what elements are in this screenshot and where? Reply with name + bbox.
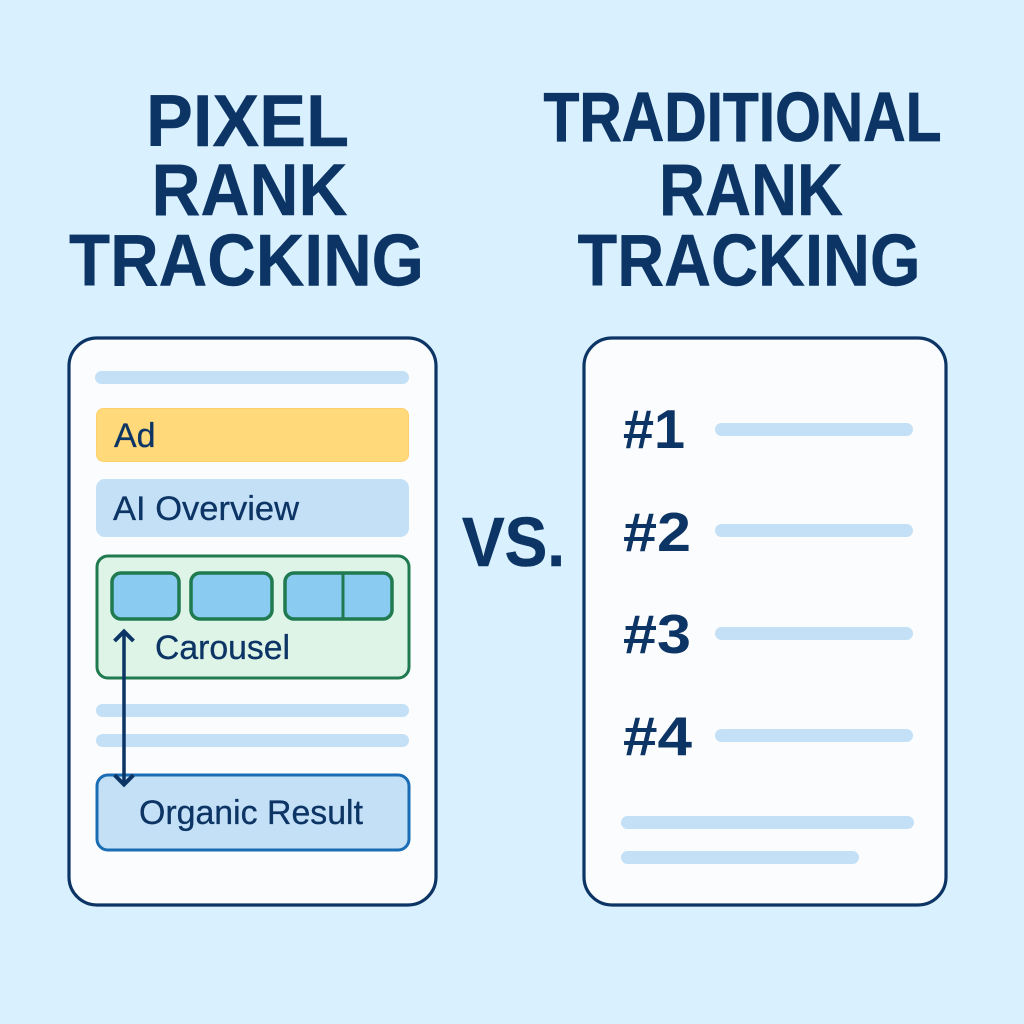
rank 2: #2 — [623, 501, 691, 563]
rank 2 — [623, 501, 913, 563]
carousel card 2 — [191, 573, 272, 619]
panel: pixel rank SERP — [69, 338, 436, 905]
title: traditional rank tracking: RANK — [659, 150, 843, 231]
rank 1 — [623, 398, 913, 460]
versus label: VS. — [462, 503, 565, 581]
carousel card 1 — [112, 573, 179, 619]
rank 3: #3 — [623, 603, 691, 665]
rank 4 — [623, 705, 913, 767]
placeholder line — [96, 734, 409, 747]
placeholder line — [621, 816, 914, 829]
carousel label: Carousel — [155, 629, 290, 667]
arrow: distance between carousel and organic result — [114, 632, 134, 784]
title: pixel rank tracking: TRACKING — [69, 220, 424, 302]
AI overview block — [96, 479, 409, 537]
placeholder line — [96, 704, 409, 717]
rank 3 — [623, 603, 913, 665]
ad block: Ad — [114, 417, 156, 455]
title: pixel rank tracking: RANK — [152, 150, 348, 231]
AI overview block: AI Overview — [113, 490, 299, 528]
rank 4: #4 — [623, 705, 692, 767]
panel: traditional rank list — [584, 338, 946, 905]
title: pixel rank tracking: PIXEL — [146, 81, 349, 162]
top placeholder line — [95, 371, 409, 384]
organic result block: Organic Result — [139, 794, 364, 832]
placeholder line — [621, 851, 859, 864]
title: traditional rank tracking: TRADITIONAL — [544, 78, 942, 156]
rank 1: #1 — [623, 398, 685, 460]
title: pixel rank tracking — [69, 81, 424, 302]
organic result block — [97, 775, 409, 850]
title: traditional rank tracking: TRACKING — [578, 220, 920, 302]
title: traditional rank tracking — [544, 78, 942, 302]
carousel card 3 — [285, 573, 392, 619]
carousel block — [97, 556, 409, 678]
ad block — [96, 408, 408, 462]
